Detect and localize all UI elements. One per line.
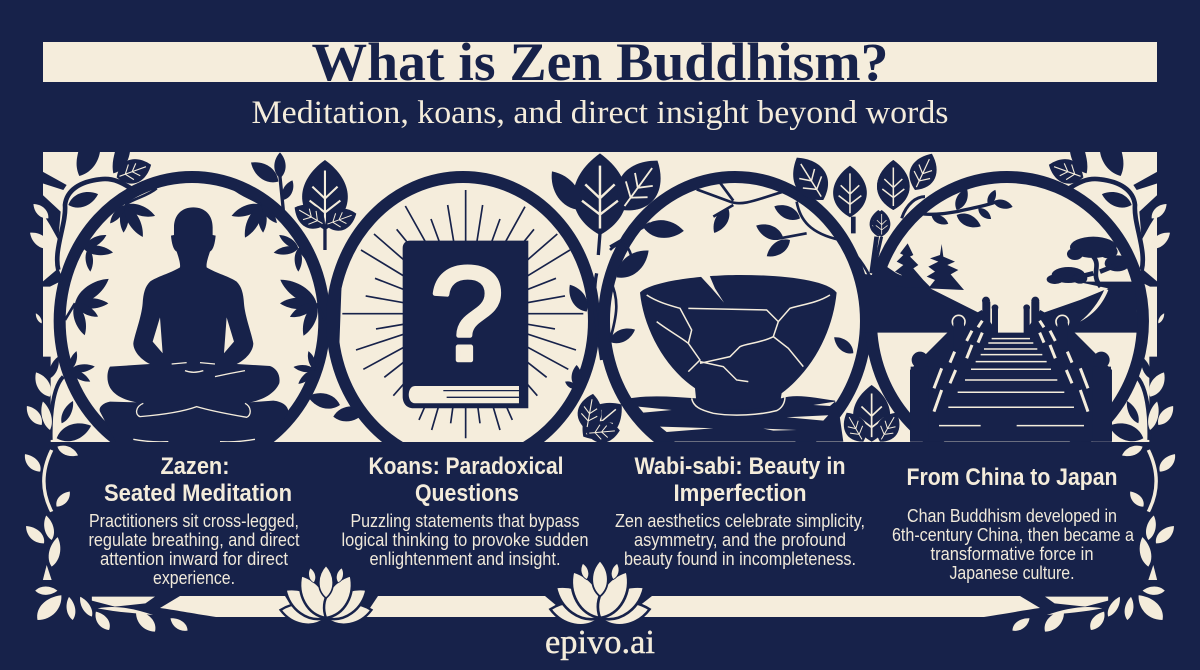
text block: wabi-sabi: beauty found in incompleteness. <box>624 549 856 569</box>
veined leaf at base <box>844 385 900 442</box>
leaves between zazen and koan circles <box>247 152 367 424</box>
right hill and bonsai tree <box>1042 237 1138 333</box>
title banner <box>43 42 1157 82</box>
text block: china to japan: Chan Buddhism developed in <box>907 506 1117 526</box>
title: What is Zen Buddhism? <box>312 32 888 92</box>
panel: china to japan circle <box>860 148 1143 465</box>
footer brand: epivo.ai <box>545 624 655 661</box>
bridge <box>910 297 1112 442</box>
panel: koan circle <box>332 153 632 465</box>
left hills and pagodas <box>865 243 978 333</box>
text block: wabi-sabi: asymmetry, and the profound <box>634 530 846 550</box>
text block: china to japan: transformative force in <box>930 544 1094 564</box>
text block: koans: logical thinking to provoke sudden <box>342 530 588 550</box>
text block: wabi-sabi: Zen aesthetics celebrate simplicity, <box>615 511 865 531</box>
text block: china to japan: From China to Japan <box>906 464 1118 491</box>
subtitle: Meditation, koans, and direct insight beyond words <box>252 95 948 131</box>
text block: china to japan: Japanese culture. <box>950 563 1074 583</box>
text block: zazen: attention inward for direct <box>100 549 288 569</box>
text block: wabi-sabi: Imperfection <box>674 480 806 507</box>
text block: wabi-sabi: Wabi-sabi: Beauty in <box>634 453 846 480</box>
illustration panel <box>43 148 1157 465</box>
leaves between koan and wabi-sabi circles <box>552 153 624 442</box>
bottom bar segments <box>160 596 1040 617</box>
text block: wabi-sabi <box>615 453 865 569</box>
text block: china to japan <box>892 464 1135 583</box>
text block: koans: Puzzling statements that bypass <box>350 511 580 531</box>
ground highlights <box>638 402 835 432</box>
icon: book <box>403 241 528 408</box>
left border vine <box>21 201 191 635</box>
icon: lotus left <box>279 565 373 628</box>
right corner vine on panel <box>1045 152 1157 446</box>
panel: wabi-sabi circle <box>604 149 910 465</box>
panel: zazen circle <box>60 152 367 465</box>
right border vine <box>1009 201 1179 635</box>
leaves inside zazen circle <box>63 188 325 387</box>
text block: koans: Questions <box>415 480 519 507</box>
text block: koans: Koans: Paradoxical <box>368 453 564 480</box>
icon: cracked kintsugi bowl <box>640 275 837 415</box>
text block: koans: enlightenment and insight. <box>370 549 560 569</box>
text block: china to japan: 6th-century China, then became a <box>892 525 1135 545</box>
text block: zazen: Seated Meditation <box>104 480 292 507</box>
icon: question mark: ? <box>430 240 504 389</box>
branch and leaves <box>873 148 1014 273</box>
icon: seated meditator <box>100 207 288 443</box>
text block: koans <box>342 453 588 569</box>
text block: zazen: experience. <box>153 568 235 588</box>
branches and leaves <box>606 149 910 357</box>
ground <box>630 396 843 442</box>
text block: zazen: regulate breathing, and direct <box>88 530 300 550</box>
icon: lotus centre <box>548 560 652 629</box>
radiating rays <box>342 190 583 438</box>
text block: zazen: Practitioners sit cross-legged, <box>89 511 299 531</box>
left corner vine on panel <box>43 152 155 446</box>
text block: zazen <box>88 453 300 588</box>
text block: zazen: Zazen: <box>160 453 230 480</box>
